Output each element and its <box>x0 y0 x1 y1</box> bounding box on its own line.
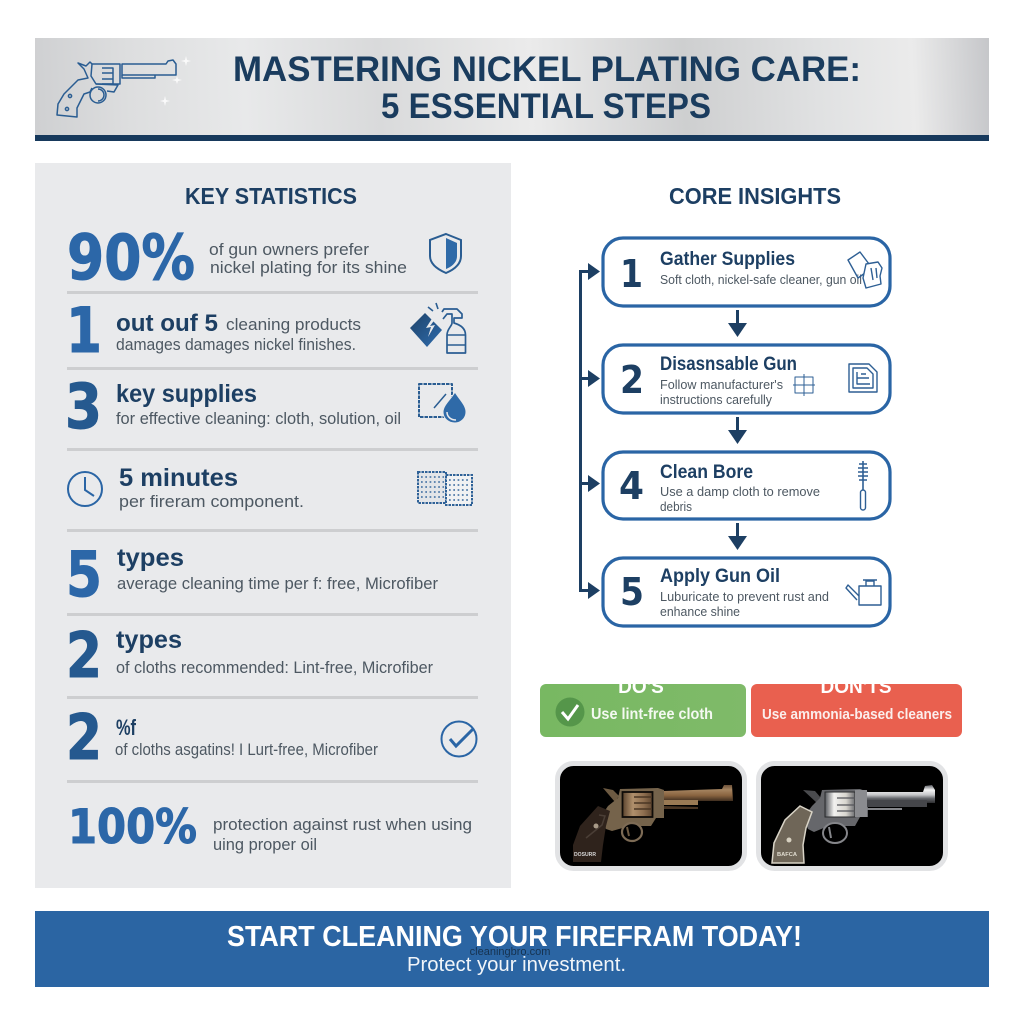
stat: 90%: of gun owners prefer <box>209 240 369 259</box>
step 1: Soft cloth, nickel-safe cleaner, gun oil <box>660 272 862 287</box>
stat: 90%: nickel plating for its shine <box>210 258 407 277</box>
step 4: Use a damp cloth to remove <box>660 484 820 499</box>
icon: clock <box>68 472 102 506</box>
stat: 3 key supplies: 3 <box>65 370 102 443</box>
footer banner: Protect your investment. <box>407 954 626 976</box>
step 1: Gather Supplies <box>660 249 795 270</box>
stat: 5 types: average cleaning time per f: free, Microfiber <box>117 574 438 593</box>
stat: 90% <box>67 221 461 294</box>
stat: 1 out of 5 <box>66 294 466 367</box>
step 4: 4 <box>619 464 644 508</box>
step 2: Follow manufacturer's <box>660 377 783 392</box>
stat: 1 out of 5: out ouf 5 <box>116 310 218 337</box>
footer banner: START CLEANING YOUR FIREFRAM TODAY! <box>227 921 802 953</box>
title: MASTERING NICKEL PLATING CARE: <box>233 50 861 89</box>
icon: check badge <box>556 698 584 726</box>
photo: polished revolver <box>758 764 946 868</box>
stat: 5 minutes: 5 minutes <box>119 464 238 492</box>
panel: don'ts: Use ammonia-based cleaners <box>762 706 952 723</box>
step 2: Disasnsable Gun <box>660 354 797 375</box>
panel: do's: Use lint-free cloth <box>591 706 713 723</box>
step 4: Clean Bore <box>660 462 753 483</box>
icon: damaged finish and spray bottle <box>410 303 466 353</box>
stat: 2 %f: %f <box>116 715 136 740</box>
icon: manual document <box>849 364 877 392</box>
stat: 1 out of 5: cleaning products <box>226 315 361 334</box>
stat: 100%: uing proper oil <box>213 835 317 854</box>
stat: 5 types: types <box>117 544 184 572</box>
header banner <box>35 38 989 141</box>
stat: 5 minutes <box>68 464 472 511</box>
arrow: step 2 to 4 <box>728 417 747 444</box>
stat: 3 key supplies: for effective cleaning: cloth, solution, oil <box>116 409 401 428</box>
heading: key statistics: KEY STATISTICS <box>185 183 357 209</box>
panel: do's: DO'S <box>618 677 664 698</box>
panel: don'ts <box>751 677 962 737</box>
title <box>233 50 861 126</box>
stat: 2 %f: 2 <box>66 701 102 774</box>
footer banner <box>35 911 989 987</box>
stat: 3 key supplies: key supplies <box>116 380 257 408</box>
step 2: instructions carefully <box>660 392 772 407</box>
icon: cloth and supplies <box>848 252 882 288</box>
icon: bore brush <box>858 461 868 510</box>
panel: key statistics <box>35 163 511 888</box>
photo: worn revolver <box>558 764 744 868</box>
stat: 3 key supplies <box>65 370 466 443</box>
panel: don'ts: DON'TS <box>820 677 892 698</box>
photo: worn revolver: DOSURR <box>574 852 596 858</box>
stat: 2 types: 2 <box>66 619 102 692</box>
stat: 90%: 90% <box>67 221 195 294</box>
stat: 5 minutes: per fireram component. <box>119 492 304 511</box>
step 5: enhance shine <box>660 604 740 619</box>
panel: do's <box>540 677 746 737</box>
icon: revolver outline <box>57 60 176 117</box>
icon: oil can <box>846 580 881 605</box>
step 2: 2 <box>620 358 644 402</box>
step 5: Luburicate to prevent rust and <box>660 589 829 604</box>
stat: 100%: 100% <box>68 800 197 855</box>
arrow: step 1 to 2 <box>728 310 747 337</box>
icon: check circle <box>442 722 476 756</box>
step 2 <box>603 345 890 413</box>
sparkles <box>160 56 191 106</box>
icon: shield <box>430 234 461 273</box>
step 4: debris <box>660 499 692 514</box>
stat: 100%: protection against rust when using <box>213 815 472 834</box>
stat: 2 types <box>66 619 433 692</box>
photo: polished revolver: BAFCA <box>777 852 797 858</box>
icon: two cloth swatches <box>418 472 472 505</box>
title: 5 ESSENTIAL STEPS <box>381 87 711 126</box>
stat: 5 types: 5 <box>66 538 102 611</box>
stat: 2 %f: of cloths asgatins! I Lurt-free, Microfiber <box>115 740 378 759</box>
arrow: feedback bracket <box>579 263 600 599</box>
stat: 5 types <box>66 538 438 611</box>
stat: 2 %f <box>66 701 476 774</box>
stat: 2 types: of cloths recommended: Lint-free, Microfiber <box>116 658 433 677</box>
step 1 <box>603 238 890 306</box>
footer banner: cleaningbro.com <box>470 946 550 958</box>
icon: cloth and oil drop <box>419 384 466 423</box>
step 5: 5 <box>620 570 644 614</box>
arrow: step 4 to 5 <box>728 523 747 550</box>
stat: 1 out of 5: 1 <box>66 294 102 367</box>
icon: small diagram <box>793 374 815 396</box>
stat: 1 out of 5: damages damages nickel finishes. <box>116 335 356 354</box>
step 1: 1 <box>620 252 643 296</box>
step 4 <box>603 452 890 519</box>
stat: 2 types: types <box>116 626 182 654</box>
stat: 100% <box>68 800 472 855</box>
heading: core insights: CORE INSIGHTS <box>669 183 841 209</box>
step 5 <box>603 558 890 626</box>
step 5: Apply Gun Oil <box>660 566 780 587</box>
